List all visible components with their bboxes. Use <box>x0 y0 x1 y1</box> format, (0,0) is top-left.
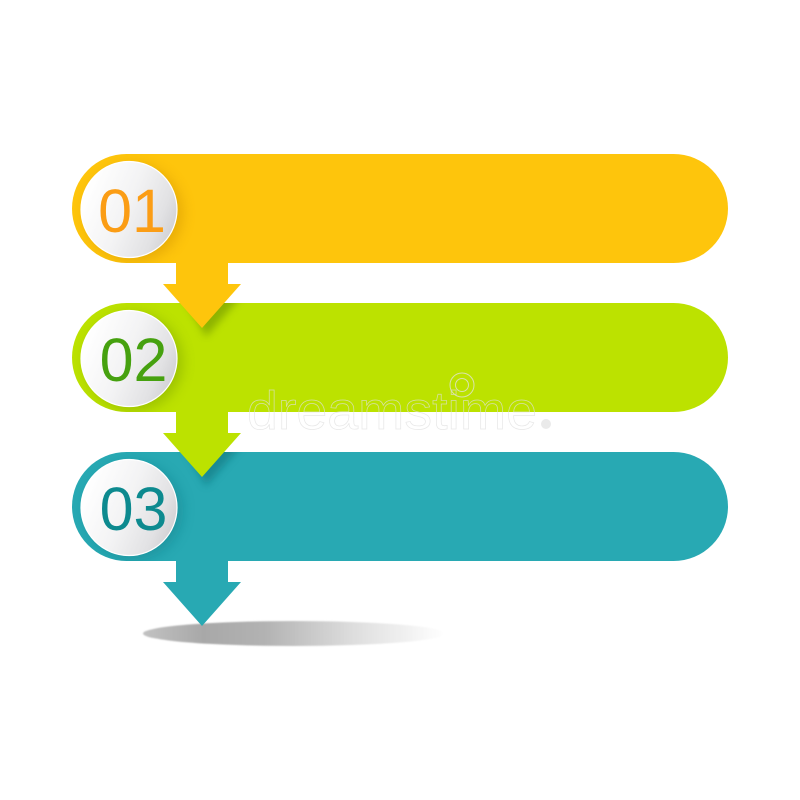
floor shadow <box>143 621 445 646</box>
step 1 <box>72 154 728 337</box>
step 3 arrow <box>163 560 241 626</box>
watermark: dreamstime: dreamstime <box>247 381 537 441</box>
arrow shadow on step 3 bar <box>192 452 238 485</box>
step 2 <box>72 303 728 486</box>
step 2 badge <box>81 310 183 411</box>
step 1 number: 01 <box>98 177 166 245</box>
step 1 badge <box>81 162 183 262</box>
step 2 bar <box>72 303 728 412</box>
arrow shadow on step 2 bar <box>188 303 240 338</box>
step 1 bar <box>72 154 728 263</box>
step 3 number: 03 <box>100 475 167 543</box>
step 3 badge <box>81 460 183 560</box>
step 2 arrow <box>163 411 241 477</box>
step 2 number: 02 <box>100 326 167 394</box>
step 1 arrow <box>163 262 241 328</box>
step 3 <box>72 452 728 626</box>
infographic: three numbered steps <box>72 154 728 647</box>
step 3 bar <box>72 452 728 561</box>
